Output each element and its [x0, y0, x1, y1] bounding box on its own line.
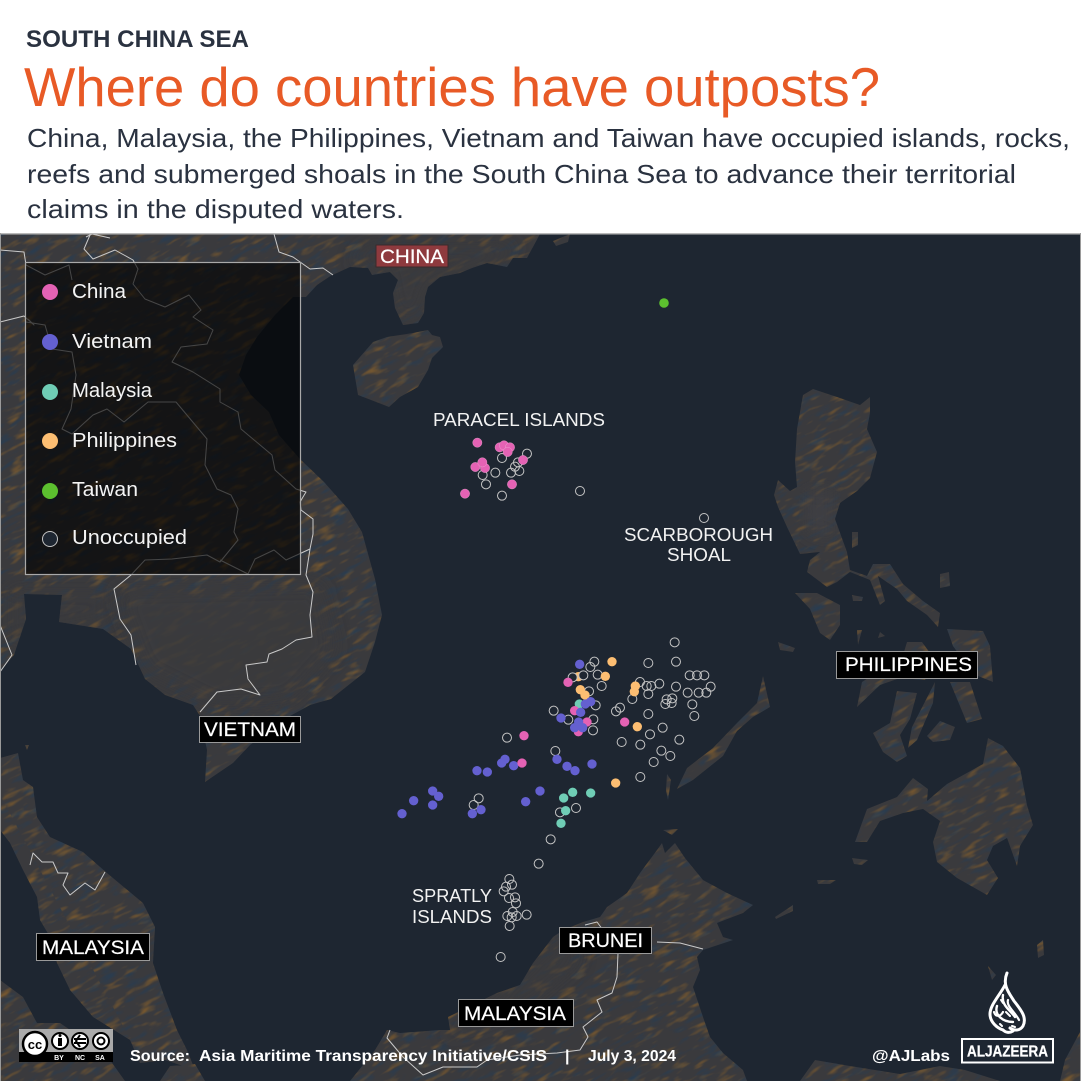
dots: Vietnam — [397, 660, 597, 818]
label: Spratly Islands — [412, 886, 492, 927]
icon: creative commons badge: NC — [75, 1055, 85, 1062]
label: Vietnam: VIETNAM — [204, 720, 296, 741]
source line: July 3, 2024 — [588, 1048, 676, 1065]
label: Philippines: PHILIPPINES — [845, 655, 972, 676]
legend — [26, 262, 300, 574]
dots: China — [519, 678, 629, 740]
label: Philippines — [836, 652, 978, 678]
label: China: CHINA — [380, 247, 444, 268]
dots: Paracel Islands — [460, 438, 531, 500]
icon: creative commons badge — [19, 1029, 113, 1062]
legend box — [26, 262, 300, 574]
label: Paracel Islands: PARACEL ISLANDS — [433, 410, 605, 430]
dots: unoccupied overlapping Philippines — [568, 671, 588, 682]
label: Malaysia Borneo — [458, 1000, 574, 1026]
label: Spratly Islands: ISLANDS — [412, 907, 492, 927]
logo: Al Jazeera wordmark — [962, 1039, 1053, 1062]
header — [24, 26, 1070, 224]
label: Scarborough Shoal — [624, 525, 773, 565]
dots: southern Spratly cluster — [496, 859, 543, 961]
label: Malaysia west: MALAYSIA — [42, 938, 144, 959]
label: Malaysia west — [36, 934, 150, 960]
dots: Philippines — [574, 657, 642, 788]
icon: creative commons badge: BY — [54, 1055, 64, 1062]
map frame edges — [0, 233, 1081, 1081]
intro text — [27, 123, 1070, 224]
legend: Vietnam — [42, 331, 152, 353]
label: Brunei — [560, 928, 652, 954]
label: Malaysia Borneo: MALAYSIA — [464, 1004, 566, 1025]
label: Vietnam — [200, 716, 300, 742]
intro text: claims in the disputed waters. — [27, 194, 404, 224]
icon: creative commons badge: SA — [95, 1055, 105, 1062]
logo: Al Jazeera wordmark: ALJAZEERA — [967, 1044, 1048, 1060]
land masses — [0, 233, 1081, 1081]
map panel — [0, 233, 1081, 1081]
intro text: China, Malaysia, the Philippines, Vietnam and Taiwan have occupied islands, rocks, — [27, 123, 1070, 153]
country borders — [0, 234, 703, 1075]
legend: China — [42, 281, 127, 303]
legend: Vietnam: Vietnam — [72, 331, 152, 353]
legend: Malaysia: Malaysia — [72, 380, 153, 402]
label: Spratly Islands: SPRATLY — [412, 886, 492, 906]
handle: @AJLabs — [872, 1048, 950, 1065]
icon: Al Jazeera flame logo — [990, 973, 1024, 1032]
dots: Malaysia — [556, 699, 595, 828]
dots: unoccupied — [469, 638, 715, 844]
dots: unoccupied single points — [576, 486, 708, 522]
label: Brunei: BRUNEI — [568, 931, 643, 952]
source line: Asia Maritime Transparency Initiative/CSIS — [199, 1048, 547, 1065]
legend: Philippines: Philippines — [72, 430, 177, 452]
label: Scarborough Shoal: SCARBOROUGH — [624, 525, 773, 545]
kicker: South China Sea: SOUTH CHINA SEA — [26, 26, 249, 53]
footer — [19, 973, 1053, 1065]
source line — [130, 1048, 676, 1065]
legend: Taiwan — [42, 479, 138, 501]
dots: central Spratly cluster — [397, 638, 715, 844]
legend: China: China — [72, 281, 127, 303]
icon: creative commons badge: cc — [28, 1037, 42, 1052]
sea background — [0, 233, 1081, 1081]
source line: Source: — [130, 1048, 190, 1065]
legend: Taiwan: Taiwan — [72, 479, 138, 501]
title: Where do countries have outposts? — [24, 56, 880, 118]
dots: Taiwan — [659, 298, 669, 308]
dots: China on top — [517, 758, 527, 768]
legend: Unoccupied: Unoccupied — [72, 527, 187, 549]
intro text: reefs and submerged shoals in the South China Sea to advance their territorial — [27, 159, 1016, 189]
label: Scarborough Shoal: SHOAL — [667, 545, 731, 565]
source line: | — [565, 1048, 569, 1065]
